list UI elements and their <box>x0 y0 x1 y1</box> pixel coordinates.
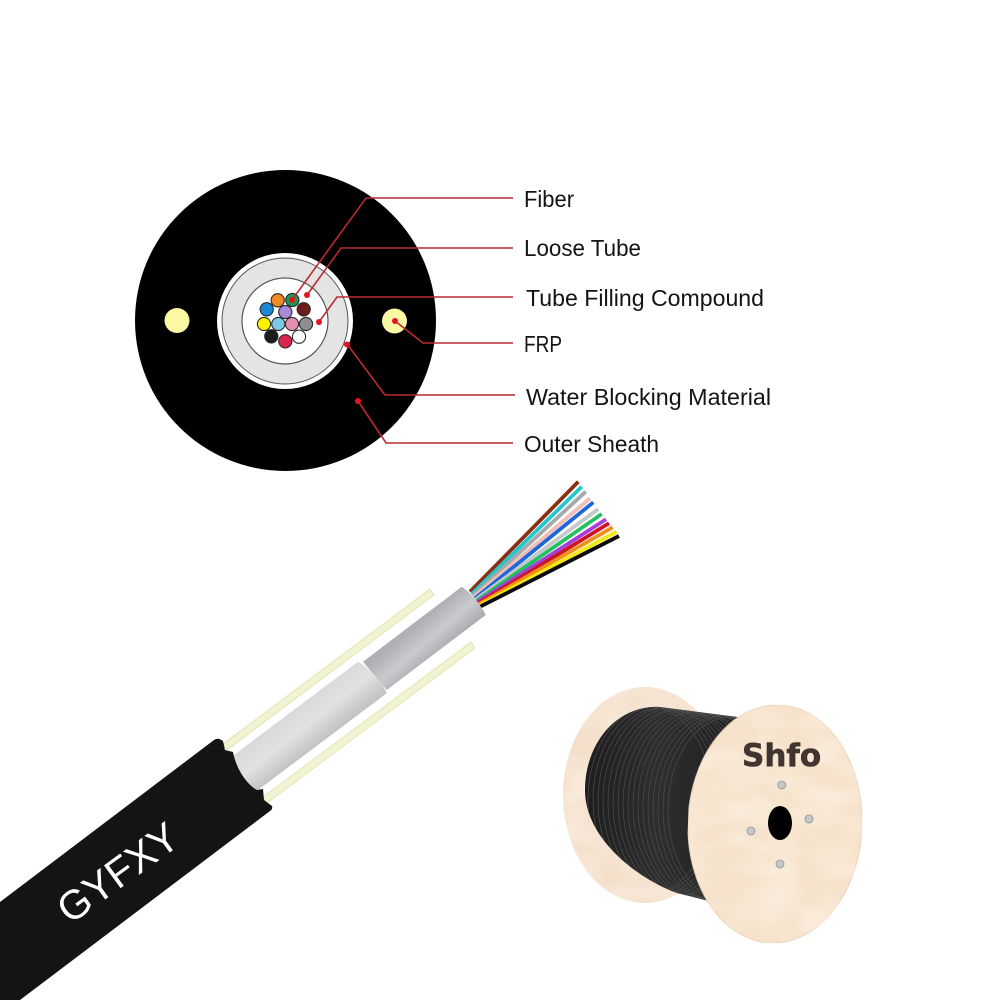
gray loose tube <box>363 587 486 690</box>
spool back flange <box>563 687 727 903</box>
right FRP strength member <box>382 308 407 334</box>
lower FRP rod <box>263 642 475 803</box>
upper FRP rod <box>223 589 434 750</box>
colored fibers <box>257 293 313 348</box>
callout labels: Outer Sheath <box>524 431 659 457</box>
cable cross-section diagram <box>135 170 436 471</box>
cable spool illustration <box>563 687 866 946</box>
black cable sheath <box>0 739 272 1000</box>
left FRP strength member <box>164 308 190 333</box>
callout leader lines <box>292 198 515 443</box>
callout labels: FRP <box>524 331 562 357</box>
spool center hole <box>768 806 792 840</box>
outer sheath <box>135 170 436 471</box>
wound black cable <box>585 706 738 900</box>
cable model text: GYFXY <box>48 813 188 932</box>
spool front flange <box>684 702 866 946</box>
callout labels: Fiber <box>524 186 574 212</box>
callout labels: Water Blocking Material <box>526 384 771 410</box>
spool brand name: Shfo <box>742 738 821 774</box>
fanned colored fibers <box>470 482 619 607</box>
fiber optic cable illustration <box>0 482 619 1000</box>
infographic canvas <box>0 170 862 1000</box>
water blocking layer <box>217 253 353 389</box>
callout labels: Loose Tube <box>524 235 641 261</box>
loose tube interior <box>242 278 328 364</box>
callout labels <box>524 186 771 457</box>
spool bolts <box>747 781 813 868</box>
callout labels: Tube Filling Compound <box>526 285 764 311</box>
callout anchor dots <box>289 292 398 404</box>
white water-blocking layer <box>232 662 387 790</box>
